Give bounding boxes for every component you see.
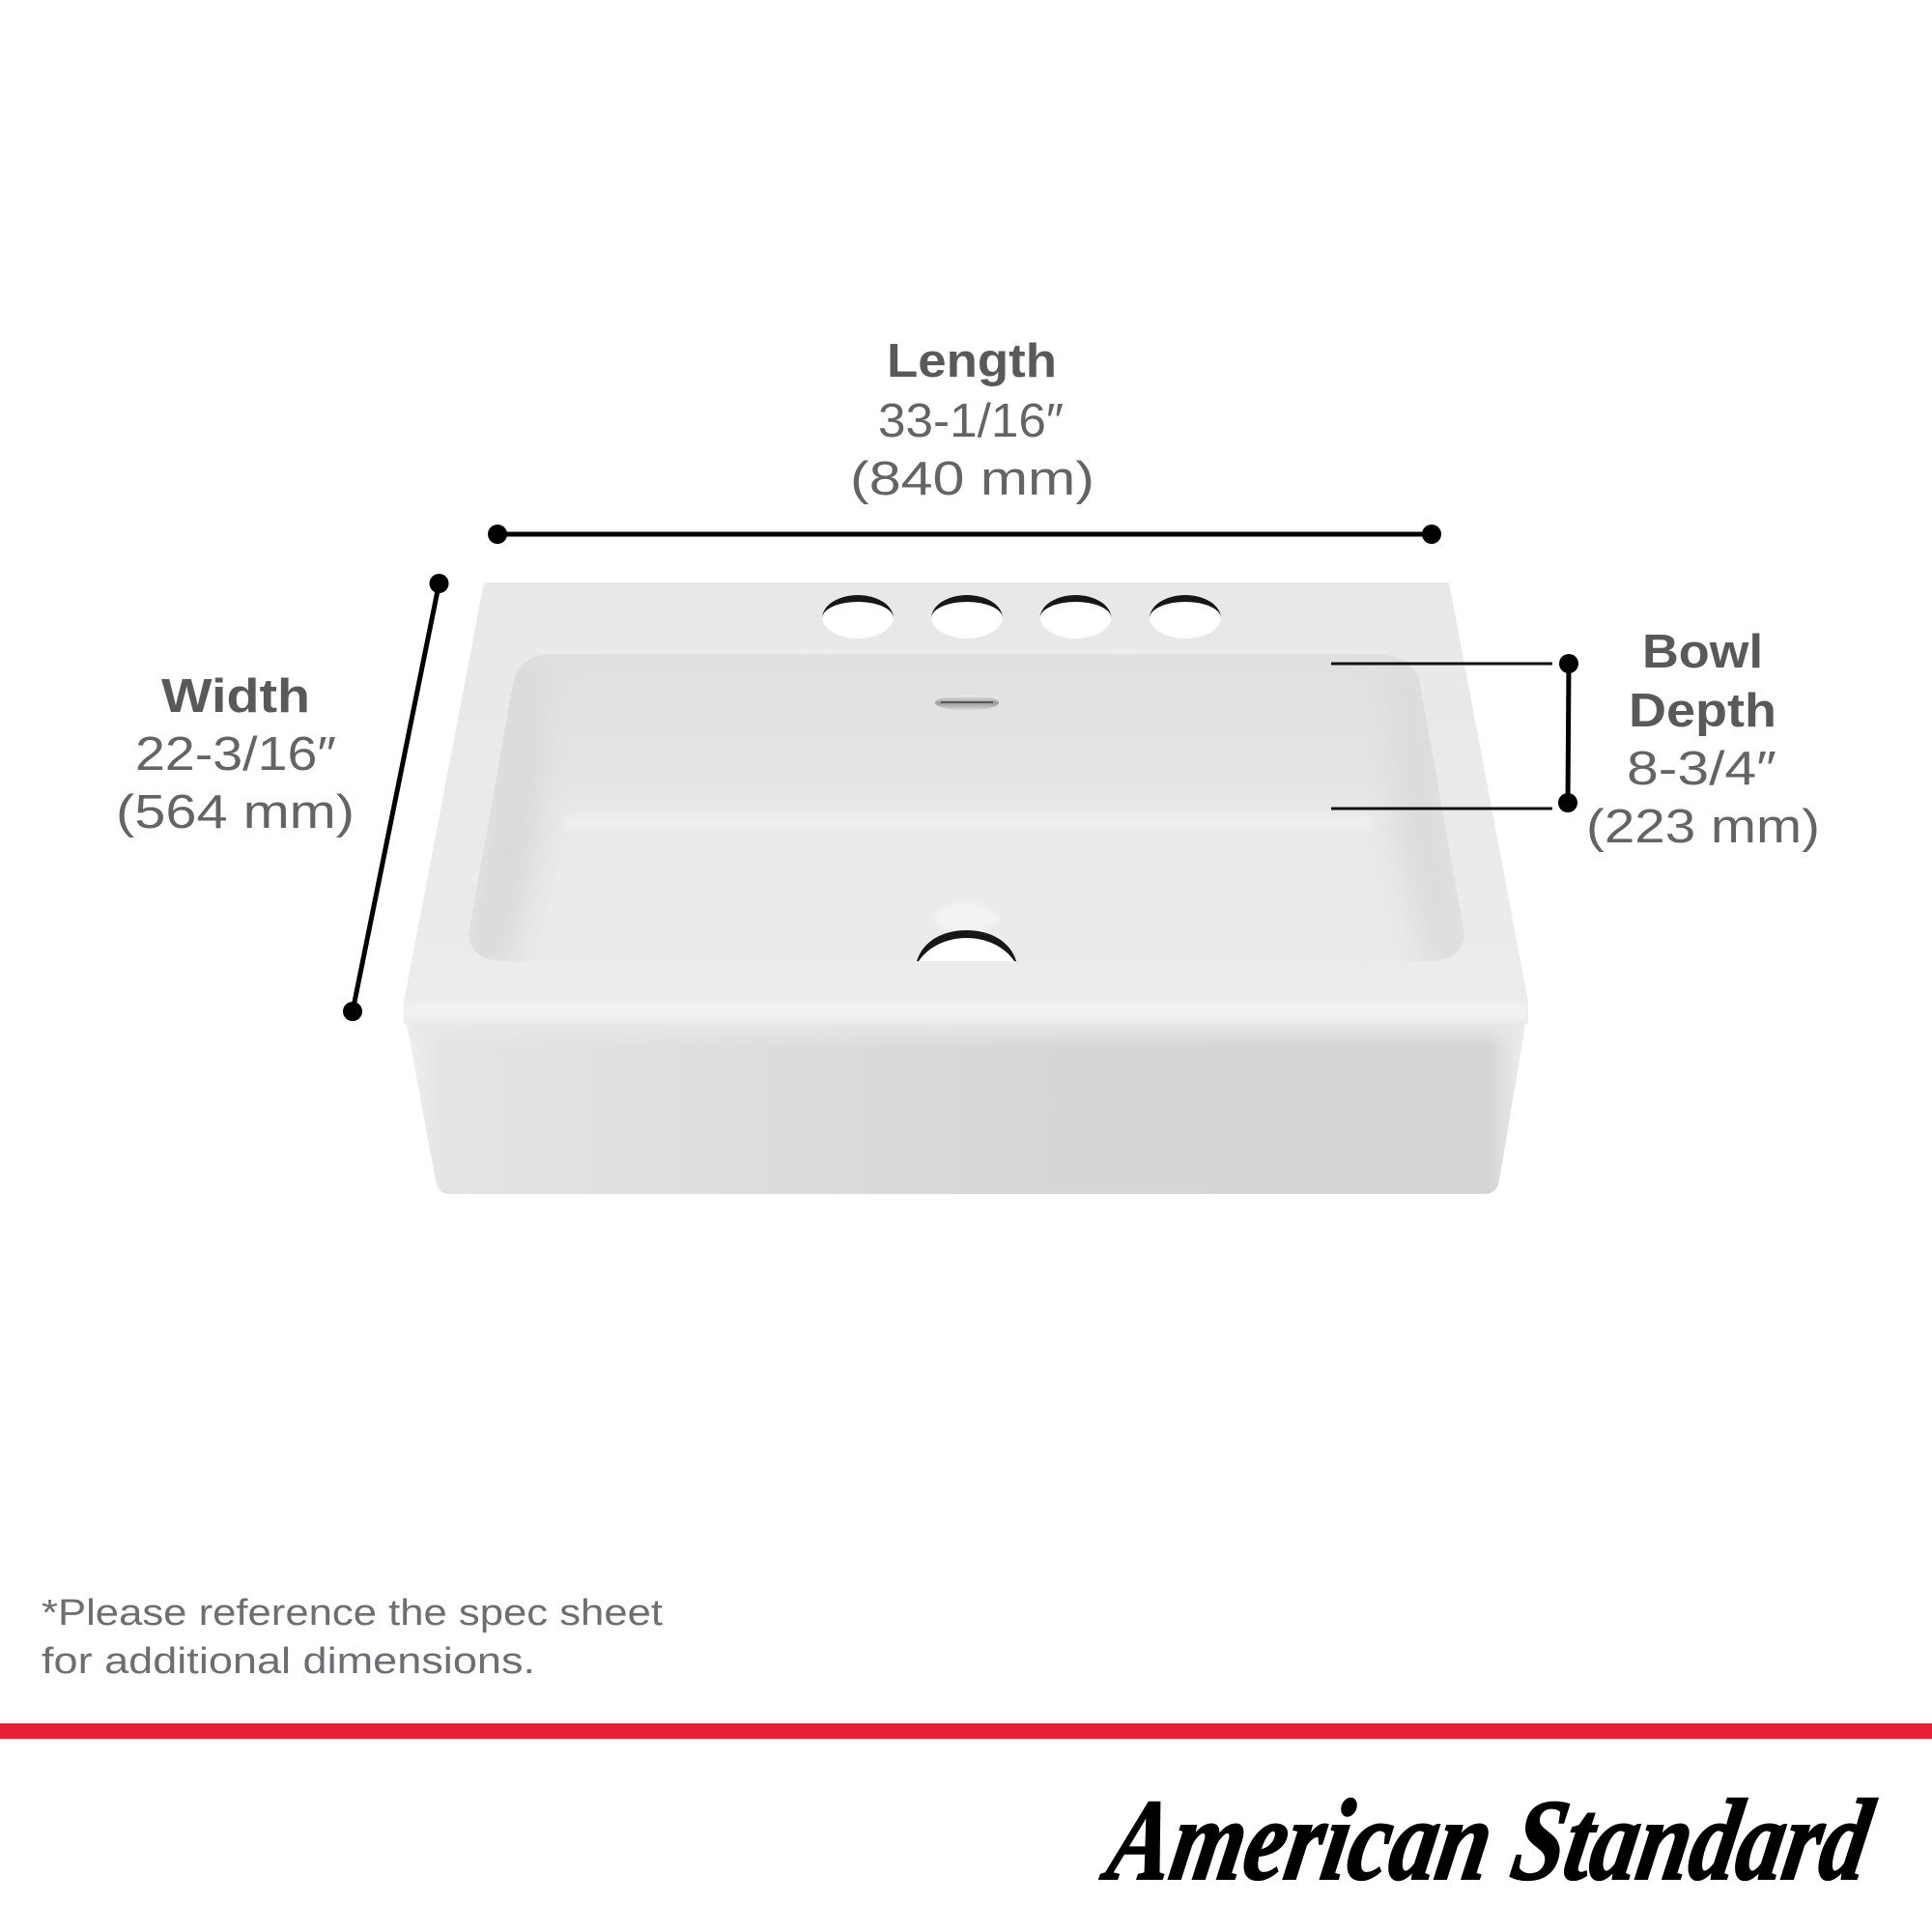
bowl depth dimension line (1331, 654, 1578, 812)
sink rim highlight (404, 999, 1528, 1025)
sink deck (404, 582, 1528, 1024)
footnote: for additional dimensions. (42, 1641, 535, 1682)
apron top shading (408, 1022, 1524, 1048)
width dimension line (343, 574, 448, 1021)
sink bowl (454, 647, 1478, 976)
label: width: (564 mm) (116, 786, 355, 838)
footnote: *Please reference the spec sheet (42, 1593, 664, 1634)
label: bowl depth: (223 mm) (1586, 801, 1820, 853)
label: width: Width (161, 670, 310, 723)
faucet hole 4 (1150, 595, 1221, 639)
infographic: sink dimensions (0, 342, 1932, 1882)
bowl rim highlight (537, 649, 1391, 654)
label: width: 22-3/16″ (135, 728, 336, 781)
faucet hole 3 (1039, 595, 1111, 639)
footnote (42, 1593, 664, 1682)
label: bowl depth: Depth (1629, 685, 1776, 737)
label: bowl depth: Bowl (1642, 626, 1763, 678)
red divider band (0, 1723, 1932, 1739)
logo badge (935, 696, 999, 711)
label: length: 33-1/16″ (878, 395, 1064, 447)
label: width (116, 670, 355, 838)
faucet hole 1 (822, 595, 894, 639)
sink front apron (405, 1014, 1527, 1194)
length dimension line (488, 525, 1441, 544)
label: length: (840 mm) (850, 453, 1094, 505)
faucet hole 2 (931, 595, 1003, 639)
label: bowl depth (1586, 626, 1820, 853)
label: length (850, 335, 1094, 505)
panel: sink illustration (404, 582, 1528, 1194)
label: length: Length (887, 335, 1057, 387)
label: bowl depth: 8-3/4″ (1627, 743, 1776, 795)
drain opening (917, 903, 1016, 961)
